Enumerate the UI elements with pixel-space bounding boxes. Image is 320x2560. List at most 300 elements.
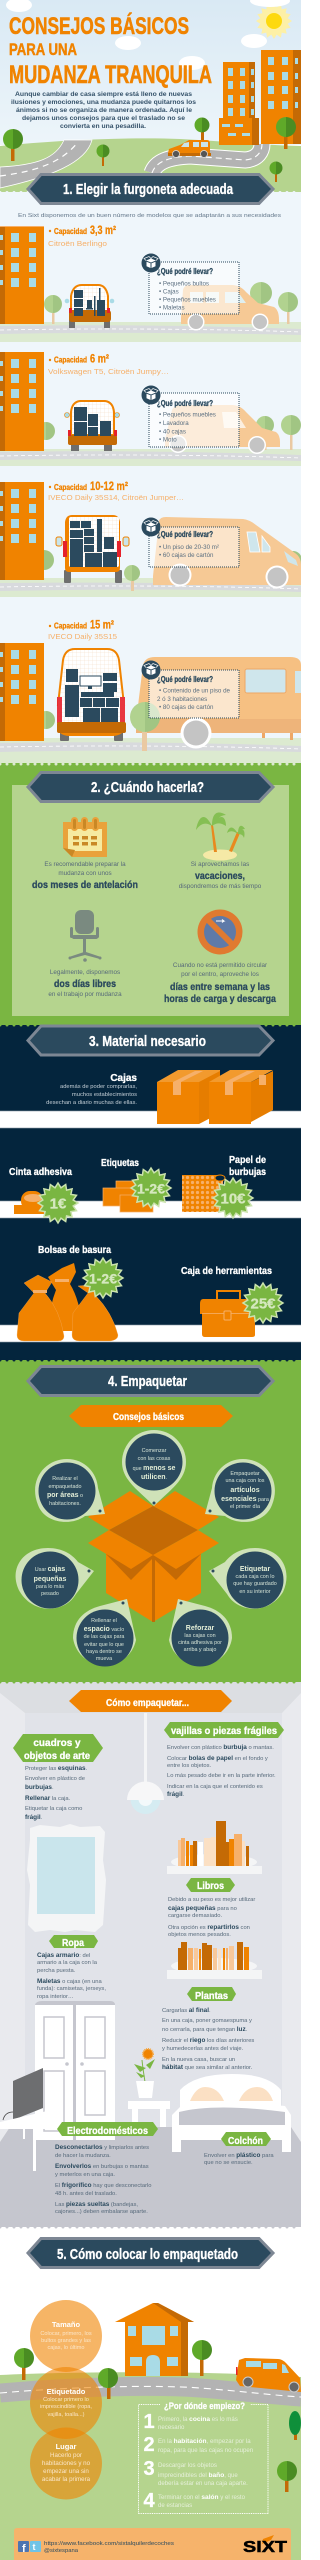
bubble: articulos esenciales: una caja con los bbox=[226, 1478, 265, 1484]
panel: van 10-12 m2 bbox=[0, 479, 302, 597]
capacity label: Capacidad bbox=[54, 622, 87, 630]
text: papel de burbujas: Papel de bbox=[229, 1154, 266, 1166]
text: vajillas: Envolver con plástico burbuja o mantas. bbox=[167, 1744, 274, 1751]
heading ribbon 3 bbox=[28, 1026, 273, 1055]
tooltip: que podre llevar bbox=[142, 386, 239, 447]
text: cinta adhesiva: Cinta adhesiva bbox=[9, 1166, 72, 1178]
logo: Sixt bbox=[243, 2535, 287, 2556]
step 3 bbox=[143, 2458, 248, 2487]
text: papel de burbujas bbox=[229, 1154, 266, 1178]
text: colchon: que no se ensucie. bbox=[204, 2160, 253, 2166]
price badge 10 euro bbox=[213, 1178, 253, 1218]
ribbon: cuadros y objetos de arte: cuadros y bbox=[33, 1738, 81, 1749]
ribbon: electrodomesticos: Electrodomésticos bbox=[67, 2126, 148, 2137]
green hills bbox=[0, 138, 301, 192]
text: dos meses: mudanza con unos bbox=[58, 870, 112, 877]
bubble: rellenar espacio: evitar que lo que bbox=[84, 1642, 124, 1648]
text: cuadros: burbujas. bbox=[25, 1784, 54, 1791]
side view van bbox=[165, 405, 280, 454]
intro text: ilusiones y emociones, una mudanza puede quitarnos los bbox=[11, 99, 197, 106]
bubble: rellenar espacio: haya dentro se bbox=[86, 1649, 122, 1655]
tooltip text: ¿Qué podré llevar? bbox=[157, 267, 213, 276]
text: dias entre semana bbox=[164, 962, 276, 1005]
step 3: imprecindibles del baño, que bbox=[158, 2472, 238, 2479]
footer links: @sixtespana bbox=[44, 2548, 79, 2554]
circle: etiquetado: imprescindible (ropa, bbox=[40, 2404, 92, 2410]
bubble: rellenar espacio: de las cajas para bbox=[84, 1634, 124, 1640]
text: libros: Otra opción es repartirlos con bbox=[168, 1924, 250, 1931]
icon: bed bbox=[172, 2074, 291, 2152]
bubble: por areas: Realizar el bbox=[52, 1476, 78, 1482]
text: dos dias libres: en el trabajo por mudanza bbox=[48, 991, 122, 998]
capacity label bbox=[49, 352, 109, 366]
price badge 1-2 euro bbox=[131, 1168, 171, 1208]
rear view van with cargo bbox=[57, 649, 126, 741]
circle: lugar: empezar una sin bbox=[43, 2468, 89, 2475]
price badge 1-2 euro: 1-2€ bbox=[89, 1270, 117, 1286]
green hill bbox=[0, 2372, 301, 2560]
heading ribbon 2 bbox=[28, 772, 273, 802]
bubble: articulos esenciales: el primer día bbox=[230, 1504, 260, 1510]
tooltip text: ¿Qué podré llevar? bbox=[157, 399, 213, 408]
icon: box bbox=[142, 518, 160, 536]
bubble: reforzar: cinta adhesiva por bbox=[178, 1640, 222, 1646]
text: cuadros: Envolver en plástico de bbox=[25, 1776, 85, 1782]
side view van bbox=[136, 657, 301, 748]
text: plantas: Reducir el riego los días anteriores bbox=[162, 2037, 254, 2044]
step 4: 4 bbox=[143, 2490, 155, 2512]
text: electrodomesticos bbox=[55, 2144, 152, 2215]
callout title: ¿Por dónde empiezo? bbox=[164, 2401, 245, 2412]
price badge 1-2 euro bbox=[83, 1258, 123, 1298]
icon: labels bbox=[103, 1181, 153, 1212]
text: libros bbox=[168, 1897, 255, 1938]
circle: lugar: Lugar bbox=[56, 2442, 76, 2451]
road band bbox=[0, 449, 301, 466]
text: libros: objetos menos pesados. bbox=[168, 1932, 231, 1938]
bubble: comenzar: que menos se bbox=[133, 1465, 176, 1472]
tooltip text: • Lavadora bbox=[159, 420, 189, 427]
text: dos dias libres bbox=[48, 969, 122, 998]
ribbon: libros: Libros bbox=[197, 1881, 224, 1892]
tooltip text bbox=[157, 399, 216, 444]
bubble: articulos esenciales: esenciales para bbox=[221, 1496, 269, 1503]
panel: como empaquetar, room bbox=[0, 1682, 301, 2227]
panel: van 6 m2 bbox=[0, 352, 301, 466]
capacity label bbox=[49, 479, 128, 493]
bubble: rellenar espacio bbox=[73, 1599, 136, 1666]
bubble: cajas pequenas bbox=[16, 1548, 94, 1609]
text: vacaciones bbox=[179, 861, 262, 890]
heading ribbon 3: 3. Material necesario bbox=[89, 1034, 206, 1050]
bubble: reforzar: las cajas con bbox=[184, 1633, 216, 1639]
text: electrodomesticos: de hacer la mudanza. bbox=[55, 2153, 111, 2159]
circle: etiquetado: Etiquetado bbox=[47, 2387, 86, 2396]
text: colchon: Envolver en plástico para bbox=[204, 2152, 274, 2159]
circle: tamano: Colocar, primero, los bbox=[40, 2331, 92, 2337]
title: MUDANZA TRANQUILA bbox=[9, 61, 212, 89]
icon: moving van bbox=[236, 2358, 301, 2392]
text: dos dias libres: Legalmente, disponemos bbox=[50, 969, 120, 976]
panel: section 5, como colocar lo empaquetado bbox=[0, 2227, 301, 2560]
panel: section 3, material necesario bbox=[0, 1025, 302, 1342]
circle: etiquetado: Colocar primero lo bbox=[43, 2397, 89, 2403]
text: etiquetas: Etiquetas bbox=[101, 1157, 139, 1169]
step 1 bbox=[143, 2411, 238, 2433]
circle: etiquetado bbox=[30, 2367, 102, 2439]
step 1: Primero, la cocina es lo más bbox=[158, 2416, 238, 2423]
bubble: cajas pequenas: pesado bbox=[41, 1591, 59, 1597]
bubble: rellenar espacio: espacio vacío bbox=[84, 1626, 124, 1633]
text: ropa: Cajas armario: del bbox=[37, 1952, 90, 1959]
text: libros: cargarse demasiado. bbox=[168, 1913, 223, 1919]
text: ropa: funda): camisetas, jerseys, bbox=[37, 1986, 106, 1992]
tooltip: que podre llevar bbox=[142, 518, 239, 567]
icon: books shelf bbox=[167, 1821, 262, 1874]
tooltip text bbox=[157, 675, 231, 711]
icon: no traffic sign bbox=[198, 910, 242, 954]
step 2: 2 bbox=[143, 2434, 155, 2456]
heading ribbon 1 bbox=[28, 174, 273, 204]
step 2 bbox=[143, 2434, 253, 2456]
title bbox=[9, 12, 212, 89]
step 4 bbox=[143, 2490, 246, 2512]
text: ropa: armario a la caja con la bbox=[37, 1960, 98, 1966]
text: vacaciones: Si aprovechamos las bbox=[191, 861, 249, 868]
ribbon: vajillas bbox=[164, 1722, 284, 1738]
tooltip text: • 40 cajas bbox=[159, 428, 186, 436]
icon: television bbox=[0, 2068, 60, 2171]
trees bbox=[44, 282, 298, 324]
text: vajillas: frágil. bbox=[167, 1791, 185, 1798]
text: plantas: hábitat que sea similar al anterior. bbox=[162, 2064, 253, 2071]
rear view van with cargo bbox=[64, 401, 120, 451]
text: cajas bbox=[46, 1073, 137, 1106]
bubble: comenzar: con las cosas bbox=[138, 1456, 171, 1462]
intro text: Aunque cambiar de casa siempre está lleno de nuevas bbox=[15, 91, 193, 98]
text: electrodomesticos: El frigorífico hay que desconectarlo bbox=[55, 2182, 152, 2189]
ribbon: cuadros y objetos de arte bbox=[13, 1734, 103, 1762]
room walls ceiling floor bbox=[0, 1682, 301, 2227]
text: electrodomesticos: Las piezas sueltas (bandejas, bbox=[55, 2201, 138, 2208]
road band bbox=[0, 322, 301, 342]
scalloped edge hero bbox=[0, 191, 301, 194]
tooltip: que podre llevar bbox=[142, 660, 239, 718]
text: plantas: En una caja, poner gomaespuma y bbox=[162, 2018, 252, 2024]
building bbox=[0, 643, 44, 741]
text: cajas: Cajas bbox=[110, 1073, 137, 1084]
circle: tamano: bultos grandes y las bbox=[41, 2338, 91, 2344]
building right bbox=[261, 50, 301, 144]
panel: van 3,3 m2 bbox=[0, 223, 301, 342]
text: ropa: percha puesta. bbox=[37, 1968, 76, 1974]
text: dos meses bbox=[32, 861, 138, 891]
price badge 1-2 euro: 1-2€ bbox=[137, 1180, 165, 1196]
text: vajillas: Colocar bolas de papel en el fondo y bbox=[167, 1755, 268, 1762]
icon: office chair bbox=[68, 910, 102, 962]
step 1: necesario bbox=[158, 2424, 185, 2431]
capacity label bbox=[49, 618, 114, 632]
text: plantas bbox=[162, 2007, 254, 2071]
text: dos meses: Es recomendable preparar la bbox=[44, 861, 126, 868]
tree behind building bbox=[37, 711, 55, 729]
subheading: como empaquetar: Cómo empaquetar... bbox=[106, 1698, 189, 1709]
building bbox=[0, 482, 44, 580]
footer links bbox=[44, 2541, 174, 2554]
step 2: En la habitación, empezar por la bbox=[158, 2438, 251, 2445]
tooltip text: • Pequeños muebles bbox=[159, 296, 216, 304]
tooltip text: • Moto bbox=[159, 436, 177, 444]
tooltip text bbox=[157, 267, 216, 312]
icon: facebook bbox=[18, 2541, 29, 2555]
subheading: como empaquetar bbox=[69, 1690, 232, 1712]
icon: calendar bbox=[63, 818, 107, 857]
text: dos dias libres: dos días libres bbox=[54, 978, 116, 990]
building left bbox=[219, 62, 259, 145]
icon: facebook: f bbox=[22, 2543, 26, 2555]
icon: twitter: t bbox=[32, 2542, 36, 2552]
icon: palm island bbox=[196, 813, 245, 860]
icon: box bbox=[142, 254, 160, 272]
icon: tape roll bbox=[14, 1191, 44, 1214]
text: vajillas: Lo más pesado debe ir en la parte inferior. bbox=[167, 1773, 276, 1779]
inner panel bbox=[12, 785, 289, 1016]
capacity label: Capacidad bbox=[54, 227, 87, 236]
bubble: etiquetar: que hay guardado bbox=[233, 1581, 277, 1587]
circle: tamano: Tamaño bbox=[52, 2320, 81, 2329]
tooltip text: • Pequeños muebles bbox=[159, 412, 216, 418]
text: libros: Debido a su peso es mejor utilizar bbox=[168, 1897, 255, 1903]
road bbox=[0, 2386, 301, 2397]
model: IVECO Daily 35S15 bbox=[48, 632, 117, 641]
text: electrodomesticos: y meterlos en una caja. bbox=[55, 2172, 115, 2178]
circle: tamano bbox=[30, 2300, 102, 2372]
text: vajillas bbox=[167, 1744, 276, 1798]
text: colchon bbox=[204, 2152, 274, 2166]
icon: open box bbox=[88, 1491, 219, 1622]
text: vacaciones: dispondremos de más tiempo bbox=[179, 883, 262, 890]
ribbon: cuadros y objetos de arte: objetos de arte bbox=[24, 1751, 90, 1762]
text: libros: cajas pequeñas para no bbox=[168, 1905, 237, 1912]
capacity label: Capacidad bbox=[54, 483, 87, 492]
subheading: consejos basicos: Consejos básicos bbox=[113, 1412, 184, 1423]
text: vacaciones: vacaciones, bbox=[195, 870, 245, 882]
bubble: etiquetar bbox=[209, 1548, 287, 1609]
price badge 1 euro: 1€ bbox=[50, 1196, 67, 1212]
text: cuadros: frágil. bbox=[25, 1814, 43, 1821]
footer links: https://www.facebook.com/sixtalquilerdecoches bbox=[44, 2541, 174, 2547]
title: CONSEJOS BÁSICOS bbox=[9, 12, 189, 40]
clouds bbox=[6, 0, 290, 70]
bubble: articulos esenciales: Empaquetar bbox=[230, 1471, 260, 1477]
heading ribbon 4 bbox=[28, 1366, 273, 1396]
road band bbox=[0, 738, 301, 763]
ribbon: libros bbox=[186, 1878, 235, 1892]
price badge 10 euro: 10€ bbox=[220, 1190, 246, 1208]
callout: por donde empiezo bbox=[138, 2401, 268, 2514]
white shelves bbox=[0, 1111, 302, 1342]
text: plantas: Cargarlas al final. bbox=[162, 2007, 211, 2014]
text: ropa: Maletas o cajas (en una bbox=[37, 1978, 102, 1985]
bubble: comenzar: Comenzar bbox=[142, 1448, 167, 1454]
icon: flower pot on table bbox=[128, 2049, 170, 2127]
hero scene: sky, sun, clouds, buildings, road, car, trees bbox=[0, 0, 301, 192]
step 4: Terminar con el salón y el resto bbox=[158, 2494, 246, 2501]
tooltip text: • 80 cajas de cartón bbox=[159, 704, 214, 711]
bubble: rellenar espacio: mueva bbox=[96, 1656, 112, 1662]
footer bar bbox=[14, 2528, 291, 2560]
price badge 1 euro bbox=[38, 1183, 78, 1223]
bubble: por areas: habitaciones. bbox=[49, 1501, 81, 1507]
bubble: comenzar: utilicen. bbox=[141, 1474, 167, 1481]
ribbon: ropa bbox=[49, 1935, 98, 1949]
text: cajas: desechan a diario muchas de ellas. bbox=[46, 1100, 137, 1106]
capacity label: 15 m² bbox=[90, 618, 114, 632]
trees bbox=[37, 415, 301, 450]
step 3: debería estar en una caja aparte. bbox=[158, 2480, 248, 2487]
panel: van 15 m2 bbox=[0, 618, 301, 763]
text: papel de burbujas: burbujas bbox=[229, 1166, 266, 1178]
logo: Sixt: SIXT bbox=[243, 2539, 287, 2556]
capacity label: 3,3 m² bbox=[90, 223, 116, 237]
bubble: articulos esenciales: artículos bbox=[230, 1487, 260, 1494]
capacity label bbox=[49, 223, 116, 237]
text: ropa: ropa interior… bbox=[37, 1994, 74, 2000]
icon: bubble wrap bbox=[182, 1175, 225, 1212]
tooltip text: • Pequeños bultos bbox=[159, 280, 209, 288]
bubble: reforzar: Reforzar bbox=[186, 1625, 214, 1632]
step 3: 3 bbox=[143, 2458, 155, 2480]
model: IVECO Daily 35S14, Citroën Jumper… bbox=[48, 493, 184, 502]
step 3: Descargar los objetos bbox=[158, 2462, 217, 2469]
tooltip text: • 60 cajas de cartón bbox=[159, 552, 214, 559]
text: vajillas: Indicar en la caja que el contenido es bbox=[167, 1784, 263, 1790]
icon: picture frame bbox=[27, 1824, 106, 1932]
building bbox=[0, 352, 44, 451]
bubble: etiquetar: en su interior bbox=[239, 1589, 271, 1595]
circle: lugar bbox=[30, 2428, 102, 2500]
section 1 intro line: En Sixt disponemos de un buen número de modelos que se adaptarán a sus necesidades bbox=[18, 213, 281, 219]
icon: box bbox=[142, 386, 160, 404]
road left bbox=[0, 140, 92, 188]
trees bbox=[3, 117, 296, 182]
icon: house bbox=[115, 2303, 194, 2376]
text: dias entre semana: por el centro, aproveche los bbox=[181, 971, 259, 978]
bubble: etiquetar: cada caja con lo bbox=[236, 1574, 274, 1580]
heading ribbon 5: 5. Cómo colocar lo empaquetado bbox=[57, 2247, 238, 2263]
ribbon: vajillas: vajillas o piezas frágiles bbox=[171, 1726, 277, 1737]
ribbon: plantas: Plantas bbox=[195, 1991, 228, 2002]
text: cuadros: Proteger las esquinas. bbox=[25, 1765, 88, 1772]
bubble: por areas: empaquetado bbox=[49, 1484, 81, 1490]
text: dos meses: dos meses de antelación bbox=[32, 879, 138, 891]
circle: lugar: Hacerlo por bbox=[50, 2452, 82, 2459]
icon: wardrobe bbox=[35, 2001, 115, 2140]
text: caja de herramientas: Caja de herramientas bbox=[181, 1265, 272, 1277]
capacity label: 10-12 m² bbox=[90, 479, 128, 493]
building bbox=[0, 226, 44, 324]
rear view van with cargo bbox=[56, 515, 129, 583]
step 4: de estancias bbox=[158, 2502, 192, 2509]
car bbox=[168, 140, 211, 158]
tooltip text: • Maletas bbox=[159, 304, 185, 312]
model: Volkswagen T5, Citroën Jumpy… bbox=[48, 367, 169, 376]
intro text: ánimos si no se organiza de manera ordenada. Aquí le bbox=[16, 107, 193, 114]
circle: lugar: habitaciones y no bbox=[42, 2460, 91, 2467]
step 2: ropa, para que las cajas no ocupen bbox=[158, 2447, 253, 2454]
ribbon: ropa: Ropa bbox=[62, 1938, 84, 1949]
tooltip: que podre llevar bbox=[142, 254, 239, 314]
icon: toolbox bbox=[200, 1291, 255, 1337]
text: electrodomesticos: cajones...) deben embalarse aparte. bbox=[55, 2209, 148, 2215]
intro text bbox=[11, 91, 197, 130]
icon: twitter bbox=[30, 2541, 41, 2552]
text: plantas: En la nueva casa, buscar un bbox=[162, 2057, 235, 2063]
icon: box bbox=[142, 660, 160, 680]
trees bbox=[34, 550, 302, 591]
bubble: etiquetar: Etiquetar bbox=[240, 1566, 270, 1573]
road right bbox=[152, 144, 262, 173]
ribbon: electrodomesticos bbox=[57, 2122, 158, 2137]
capacity label: 6 m² bbox=[90, 352, 109, 366]
tooltip text: ¿Qué podré llevar? bbox=[157, 675, 213, 684]
trees bbox=[14, 2340, 301, 2492]
bubble: por areas bbox=[35, 1459, 105, 1522]
model: Citroën Berlingo bbox=[48, 239, 107, 248]
icon: books shelf 2 bbox=[167, 1942, 262, 1979]
text: cajas: muchos establecimientos bbox=[72, 1092, 137, 1098]
text: vajillas: entre los objetos. bbox=[167, 1763, 212, 1769]
ribbon: colchon: Colchón bbox=[228, 2136, 263, 2147]
heading ribbon 4: 4. Empaquetar bbox=[108, 1374, 187, 1390]
side view van bbox=[181, 285, 279, 330]
panel: section 4, empaquetar bbox=[0, 1360, 301, 1666]
bubble: cajas pequenas: Usar cajas bbox=[35, 1566, 65, 1573]
rear view van with cargo bbox=[65, 285, 114, 328]
bubble: articulos esenciales bbox=[205, 1459, 275, 1522]
bubble: cajas pequenas: para lo más bbox=[36, 1584, 64, 1590]
text: cuadros: Etiquetar la caja como bbox=[25, 1806, 82, 1812]
road band bbox=[0, 578, 301, 597]
tooltip text: • Contenido de un piso de bbox=[159, 688, 231, 694]
bubble: comenzar bbox=[122, 1430, 186, 1506]
tooltip text: • Un piso de 20-30 m² bbox=[159, 544, 219, 551]
text: dias entre semana: horas de carga y descarga bbox=[164, 993, 276, 1005]
bubble: reforzar bbox=[169, 1599, 232, 1666]
text: ropa bbox=[37, 1952, 106, 2000]
text: plantas: no cerrarla, para que tengan luz. bbox=[162, 2026, 248, 2033]
bubble: rellenar espacio: Rellenar el bbox=[91, 1618, 117, 1624]
text: cuadros: Rellenar la caja. bbox=[25, 1795, 71, 1802]
icon: sun bbox=[256, 3, 292, 39]
icon: ceiling lamp bbox=[127, 1713, 164, 1814]
tooltip text: 2 ó 3 habitaciones bbox=[157, 696, 207, 703]
capacity label: Capacidad bbox=[54, 356, 87, 364]
text: cajas: además de poder comprarlas, bbox=[60, 1084, 137, 1090]
heading ribbon 2: 2. ¿Cuándo hacerla? bbox=[91, 780, 204, 796]
tree front bbox=[130, 702, 160, 751]
text: electrodomesticos: 48 h. antes del traslado. bbox=[55, 2191, 117, 2197]
price badge 25 euro bbox=[243, 1283, 283, 1323]
bubble: reforzar: arriba y abajo bbox=[184, 1647, 216, 1653]
title: PARA UNA bbox=[9, 40, 77, 59]
text: electrodomesticos: Desconectarlos y limpiarlos antes bbox=[55, 2144, 149, 2151]
tooltip text bbox=[157, 530, 219, 559]
icon: trash bags bbox=[17, 1263, 118, 1341]
text: cuadros bbox=[25, 1765, 88, 1821]
circle: tamano: cajas, lo último bbox=[48, 2345, 84, 2351]
intro text: dejamos unos consejos para que el traslado no se bbox=[22, 115, 186, 122]
